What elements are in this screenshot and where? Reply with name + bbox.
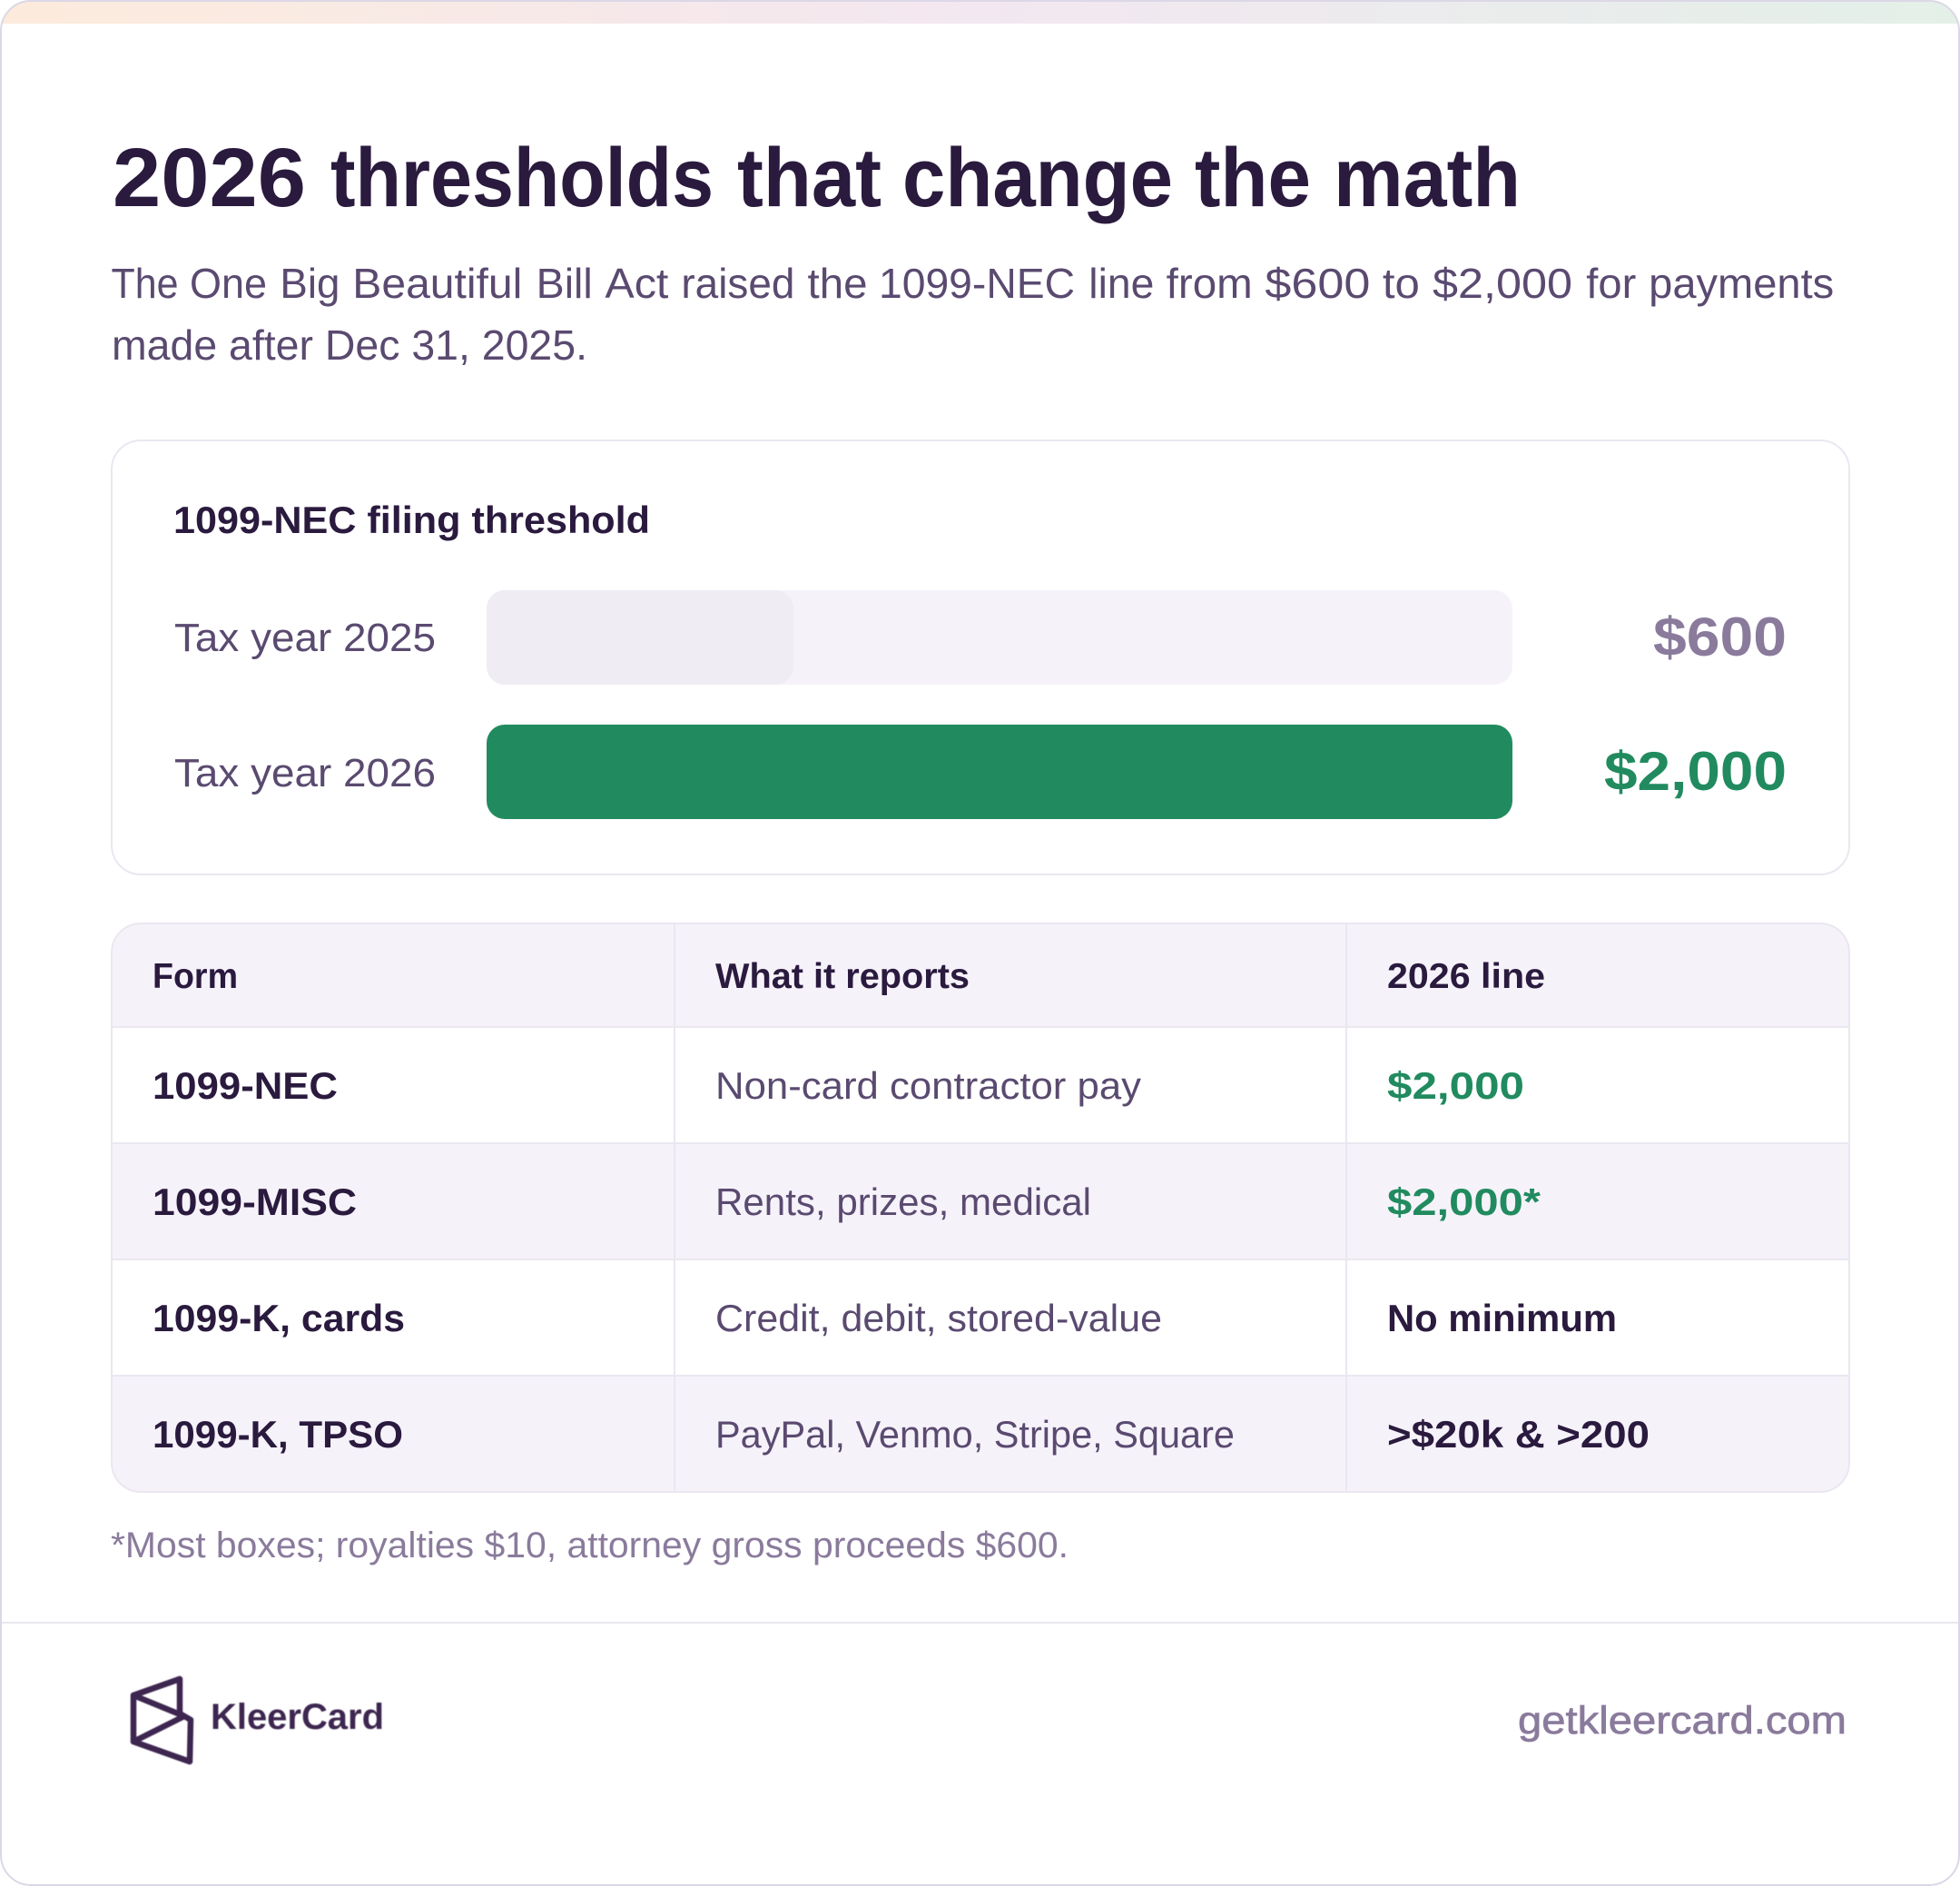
title: math [1334,132,1521,224]
subtitle: Bill [537,260,593,307]
subtitle: $600 [1265,260,1370,307]
subtitle: made after Dec 31, 2025. [112,321,587,369]
row: tax year 2025: Tax year 2025 [174,616,436,660]
header row: What it reports [715,957,970,996]
title: thresholds [330,132,714,224]
row: 1099-K, TPSO: 1099-K, TPSO [153,1413,403,1456]
chart heading: 1099-NEC filing threshold [173,499,650,541]
row: 1099-NEC: Non-card contractor pay [715,1064,1141,1107]
subtitle: the [808,260,868,307]
title: 2026 [113,132,306,224]
subtitle: to [1383,260,1420,307]
row: 1099-MISC [153,1180,1541,1223]
subtitle: $2,000 [1433,260,1572,307]
subtitle: raised [681,260,794,307]
subtitle: Beautiful [352,260,522,307]
logo: KleerCard [133,1679,384,1762]
panel frame [112,440,1849,874]
row: 1099-K, cards: Credit, debit, stored-value [715,1297,1162,1339]
row: 1099-MISC: 1099-MISC [153,1180,357,1223]
row: 1099-K, cards [153,1297,1617,1339]
subtitle: Big [280,260,340,307]
icon: folded card mark [133,1679,191,1762]
row: 1099-K, TPSO [153,1413,1650,1456]
row: 1099-MISC: $2,000* [1387,1180,1541,1223]
row: 1099-K, TPSO: PayPal, Venmo, Stripe, Square [715,1413,1235,1456]
row: tax year 2026: $2,000 [1604,741,1787,802]
wordmark: KleerCard [211,1697,384,1737]
footnote: *Most boxes; royalties $10, attorney gross proceeds $600. [111,1526,1069,1565]
header row [153,957,1545,996]
row: 1099-NEC: 1099-NEC [153,1064,338,1107]
subtitle: One [190,260,267,307]
row: 1099-NEC [153,1064,1524,1107]
subtitle: 1099-NEC [879,260,1075,307]
subtitle: from [1167,260,1253,307]
subtitle: for [1586,260,1636,307]
row: tax year 2026 [174,725,1787,819]
table: forms and 2026 lines [112,923,1849,1492]
row: 1099-K, cards: 1099-K, cards [153,1297,405,1339]
website url: getkleercard.com [1518,1699,1847,1743]
subtitle: The [111,260,178,307]
row: tax year 2025: $600 [1653,607,1787,667]
title: that [737,132,882,224]
row: 1099-MISC: Rents, prizes, medical [715,1180,1091,1223]
row: 1099-K, TPSO: >$20k & >200 [1387,1413,1650,1456]
table row backgrounds [112,923,1849,1492]
row: 1099-NEC: $2,000 [1387,1064,1524,1107]
row: tax year 2026: Tax year 2026 [174,751,436,795]
subtitle: line [1088,260,1154,307]
top gradient strip [0,0,1960,24]
title: the [1195,132,1311,224]
subtitle [111,260,1834,369]
row: 1099-K, cards: No minimum [1387,1297,1617,1339]
header row: Form [153,957,238,996]
title [113,132,1521,224]
row: tax year 2025 [174,590,1787,685]
subtitle: Act [605,260,669,307]
table frame [112,923,1849,1492]
panel: 1099-NEC filing threshold chart [112,440,1849,874]
title: change [902,132,1173,224]
header row: 2026 line [1387,957,1545,996]
subtitle: payments [1649,260,1834,307]
